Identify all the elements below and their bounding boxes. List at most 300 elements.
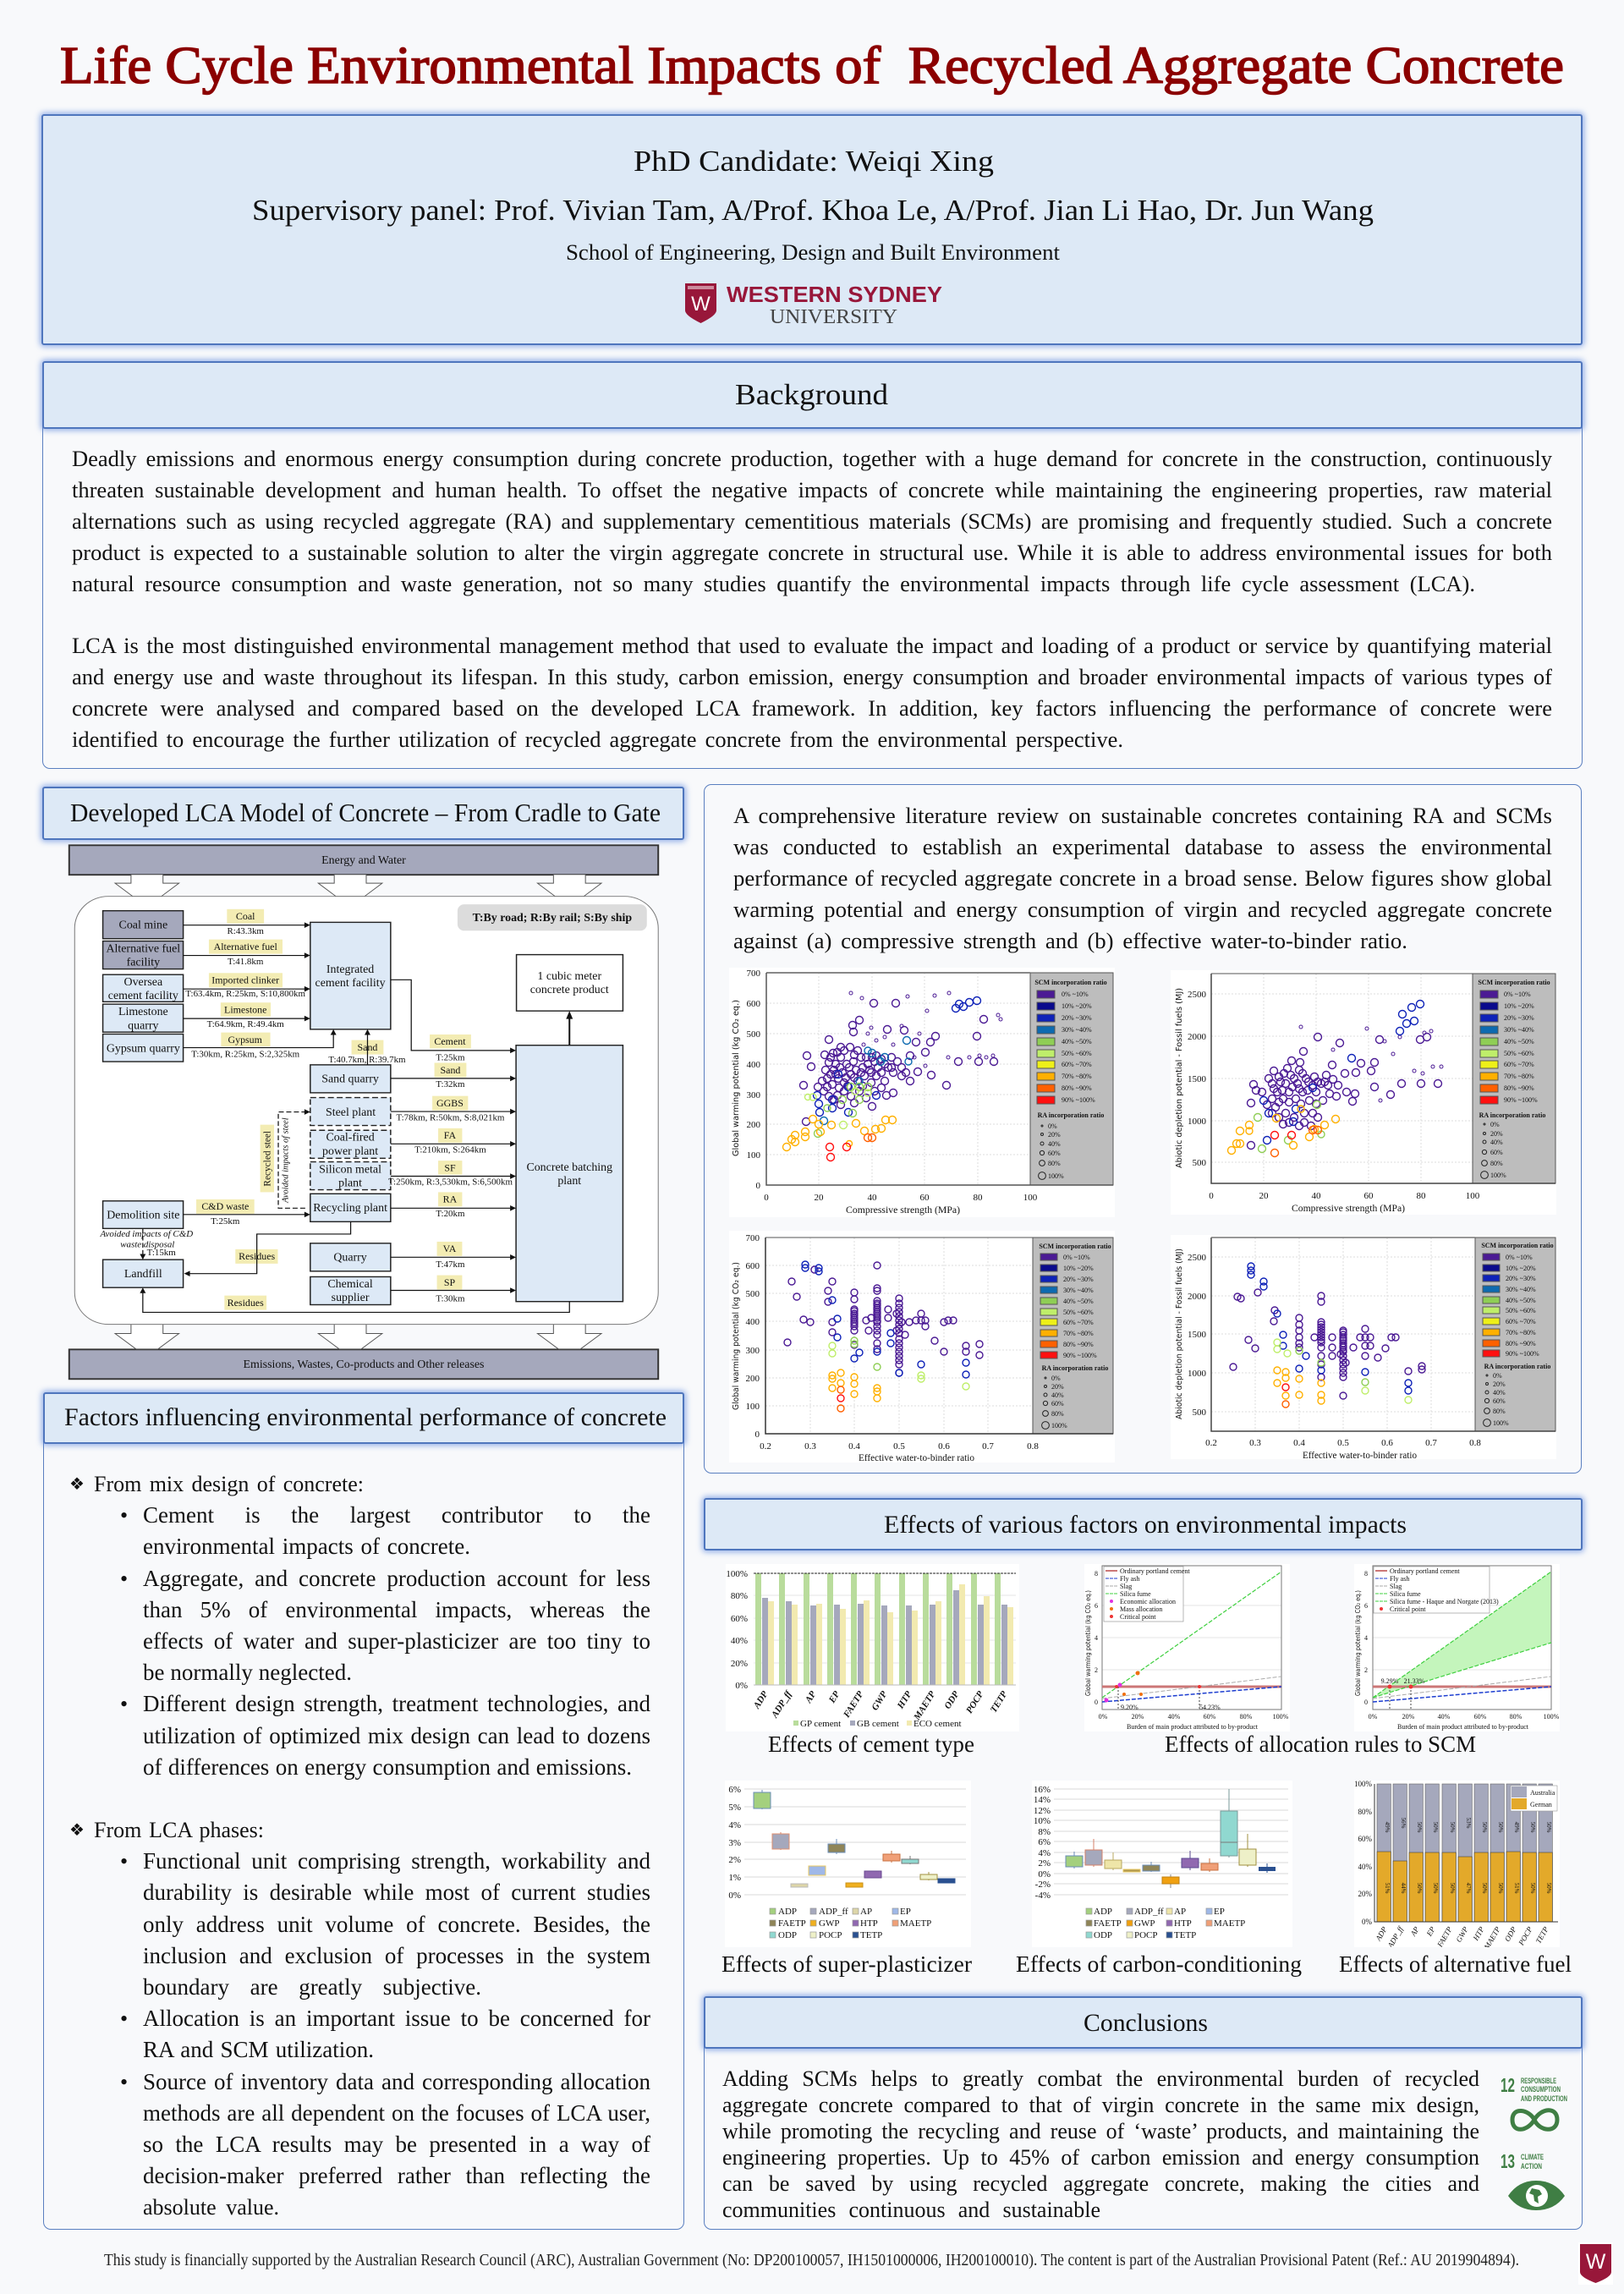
chart: allocation rules right: Silica fume xyxy=(1390,1590,1421,1598)
chart: effects of super-plasticizer: ADP xyxy=(778,1907,797,1917)
chart: effects of carbon-conditioning: POCP xyxy=(1134,1930,1158,1940)
diagram: LCA system boundary flowchart: Coal mine xyxy=(119,919,167,930)
chart: GWP vs compressive strength: 20% xyxy=(1048,1131,1061,1139)
diagram: LCA system boundary flowchart: Alternative fuel xyxy=(106,942,180,954)
diagram: LCA system boundary flowchart: Landfill xyxy=(124,1267,162,1280)
chart: abiotic depletion vs water-to-binder ratio: 60% ~70% xyxy=(1506,1318,1536,1325)
chart: effects of alternative fuel: 49% xyxy=(1513,1822,1520,1833)
panel: conclusions body xyxy=(704,2043,1583,2230)
chart: effects of super-plasticizer: 2% xyxy=(728,1855,741,1865)
chart: abiotic depletion vs water-to-binder ratio: 0.6 xyxy=(1381,1438,1393,1448)
chart: effects of alternative fuel: German xyxy=(1530,1801,1552,1808)
diagram: LCA system boundary flowchart: Coal-fired xyxy=(326,1131,375,1143)
chart: allocation rules left: Economic allocation xyxy=(1120,1598,1176,1605)
chart: abiotic depletion vs water-to-binder ratio: 0.7 xyxy=(1425,1438,1437,1448)
chart: GWP vs water-to-binder ratio: 700 xyxy=(746,1233,760,1243)
heading: conclusions: Conclusions xyxy=(1084,2009,1208,2037)
chart: GWP vs compressive strength: 40% ~50% xyxy=(1062,1038,1092,1045)
chart: abiotic depletion vs compressive strength: Compressive strength (MPa) xyxy=(1292,1202,1405,1214)
caption: super-plasticizer, carbon-conditioning, alternative fuel: Effects of alternative fuel xyxy=(1339,1951,1572,1977)
chart: GWP vs compressive strength: 90% ~100% xyxy=(1062,1096,1095,1104)
text block: factors list: Functional unit comprising strength, workability and xyxy=(143,1848,650,1874)
diagram: LCA system boundary flowchart: T:210km, S:264km xyxy=(414,1146,486,1155)
chart: GWP vs water-to-binder ratio: 0.2 xyxy=(760,1441,771,1452)
panel: authors and affiliation xyxy=(41,114,1583,345)
chart: effects of carbon-conditioning: -2% xyxy=(1035,1880,1051,1890)
text block: factors list: utilization of optimized mix design can lead to dozens xyxy=(143,1722,650,1748)
chart: effects of cement type: GP cement xyxy=(800,1719,841,1729)
diagram: LCA system boundary flowchart: T:30km, R:25km, S:2,325km xyxy=(191,1051,300,1059)
diagram: LCA system boundary flowchart: T:25km xyxy=(211,1217,240,1227)
chart: effects of carbon-conditioning: 12% xyxy=(1034,1806,1051,1816)
chart: allocation rules left: Fly ash xyxy=(1120,1575,1139,1583)
chart: effects of cement type: AP xyxy=(803,1689,819,1705)
diagram: LCA system boundary flowchart: plant xyxy=(338,1177,362,1188)
diagram: LCA system boundary flowchart: Avoided impacts of steel xyxy=(281,1117,291,1204)
chart: abiotic depletion vs water-to-binder ratio: 20% ~30% xyxy=(1506,1275,1536,1282)
text: • xyxy=(120,1503,128,1528)
chart: GWP vs compressive strength: 40% xyxy=(1048,1140,1061,1148)
chart: abiotic depletion vs compressive strength xyxy=(1175,973,1556,1214)
chart: effects of alternative fuel: Australia xyxy=(1530,1789,1555,1797)
panel: factors body xyxy=(43,1438,684,2230)
text block: conclusions: while promoting the recycling and reuse of ‘waste’ products, and maintaining the xyxy=(722,2119,1479,2143)
chart: abiotic depletion vs water-to-binder ratio: 40% xyxy=(1493,1389,1506,1397)
chart: allocation rules left: 2 xyxy=(1095,1666,1098,1674)
chart: effects of alternative fuel: 50% xyxy=(1529,1822,1536,1833)
diagram: LCA system boundary flowchart: Avoided impacts of C&D xyxy=(99,1230,193,1239)
chart: effects of cement type: HTP xyxy=(895,1689,914,1711)
chart: abiotic depletion vs water-to-binder ratio: 10% ~20% xyxy=(1506,1265,1536,1272)
chart: effects of alternative fuel: HTP xyxy=(1471,1925,1486,1943)
chart: abiotic depletion vs compressive strength: 100 xyxy=(1466,1191,1480,1201)
diagram: LCA system boundary flowchart: Concrete batching xyxy=(526,1161,612,1173)
chart: abiotic depletion vs water-to-binder ratio: 0.4 xyxy=(1293,1438,1305,1448)
chart: GWP vs compressive strength: 10% ~20% xyxy=(1062,1002,1092,1010)
text block: background paragraphs: alternations such as using recycled aggregate (RA) and supplementary cementitious materials (SCMs) are promising and frequently studied. Such a concrete xyxy=(72,508,1552,534)
chart: effects of cement type: GWP xyxy=(870,1689,890,1712)
chart: abiotic depletion vs water-to-binder ratio: 1000 xyxy=(1188,1369,1206,1379)
chart: GWP vs water-to-binder ratio xyxy=(732,1233,1113,1463)
title: Life Cycle Environmental Impacts of Recycled Aggregate Concrete xyxy=(60,37,1564,95)
chart: GWP vs compressive strength: 100 xyxy=(1023,1193,1038,1203)
chart: GWP vs water-to-binder ratio: SCM incorporation ratio xyxy=(1039,1243,1111,1250)
chart: abiotic depletion vs water-to-binder ratio: RA incorporation ratio xyxy=(1484,1363,1550,1370)
chart: effects of carbon-conditioning: GWP xyxy=(1134,1918,1155,1929)
chart: GWP vs compressive strength: 0% xyxy=(1048,1122,1057,1130)
text block: background paragraphs: threaten sustainable development and human health. To offset the negative impacts of concrete while maintaining the engineering properties, raw material xyxy=(72,477,1552,502)
chart: abiotic depletion vs water-to-binder ratio: 0.5 xyxy=(1337,1438,1349,1448)
chart: allocation rules right: 6 xyxy=(1364,1602,1368,1610)
chart: effects of cement type: ADP xyxy=(751,1689,771,1711)
panel: authors and affiliation: W xyxy=(691,293,710,316)
chart: effects of alternative fuel: 50% xyxy=(1432,1822,1439,1833)
panel: authors and affiliation: Supervisory panel: Prof. Vivian Tam, A/Prof. Khoa Le, A/Prof. Jian Li Hao, Dr. Jun Wang xyxy=(252,194,1374,227)
diagram: LCA system boundary flowchart: Demolition site xyxy=(107,1209,179,1221)
chart: abiotic depletion vs water-to-binder ratio: 30% ~40% xyxy=(1506,1286,1536,1293)
chart: abiotic depletion vs water-to-binder ratio: 70% ~80% xyxy=(1506,1329,1536,1336)
diagram: LCA system boundary flowchart: FA xyxy=(444,1130,457,1141)
chart: effects of carbon-conditioning xyxy=(1034,1785,1288,1940)
diagram: LCA system boundary flowchart: Integrated xyxy=(326,963,374,975)
diagram: LCA system boundary flowchart: Recycling plant xyxy=(313,1201,387,1214)
text block: factors list: Source of inventory data and corresponding allocation xyxy=(143,2069,650,2094)
chart: effects of cement type: FAETP xyxy=(842,1689,866,1720)
chart: GWP vs compressive strength: 50% ~60% xyxy=(1062,1050,1092,1057)
chart: GWP vs compressive strength: 100 xyxy=(746,1150,761,1161)
chart: effects of alternative fuel: 50% xyxy=(1545,1822,1552,1833)
chart: allocation rules left: 0% xyxy=(1099,1713,1108,1720)
diagram: LCA system boundary flowchart: Chemical xyxy=(327,1278,373,1290)
chart: abiotic depletion vs water-to-binder ratio: 20% xyxy=(1493,1380,1506,1388)
chart: effects of super-plasticizer: 1% xyxy=(728,1873,741,1883)
chart: abiotic depletion vs compressive strength: 60 xyxy=(1363,1191,1374,1201)
chart: effects of super-plasticizer: ODP xyxy=(778,1930,797,1940)
chart: GWP vs water-to-binder ratio: RA incorporation ratio xyxy=(1042,1364,1108,1372)
chart: abiotic depletion vs compressive strength: 40 xyxy=(1311,1191,1321,1201)
chart: effects of alternative fuel: 50% xyxy=(1416,1822,1423,1833)
text block: literature review intro: A comprehensive literature review on sustainable concretes containing RA and SCMs xyxy=(733,802,1552,827)
chart: GWP vs water-to-binder ratio: 20% ~30% xyxy=(1063,1276,1094,1283)
chart: effects of cement type: 0% xyxy=(735,1681,748,1691)
diagram: LCA system boundary flowchart: plant xyxy=(557,1174,581,1187)
text block: conclusions: aggregate concrete compared to that of virgin concrete in the same mix design, xyxy=(722,2093,1479,2117)
chart: effects of alternative fuel: 50% xyxy=(1529,1883,1536,1894)
diagram: LCA system boundary flowchart: Sand quarry xyxy=(321,1073,379,1085)
chart: effects of cement type: EP xyxy=(826,1689,842,1705)
diagram: LCA system boundary flowchart: T:15km xyxy=(147,1249,176,1258)
text block: factors list: effects of water and super-plasticizer are too tiny to xyxy=(143,1628,650,1654)
chart: allocation rules left: 100% xyxy=(1273,1713,1289,1720)
chart: allocation rules left: 20% xyxy=(1132,1713,1144,1720)
diagram: LCA system boundary flowchart: cement facility xyxy=(315,976,386,989)
chart: allocation rules left: 0 xyxy=(1095,1699,1098,1706)
heading: conclusions xyxy=(704,1996,1583,2049)
text: • xyxy=(120,1849,128,1874)
chart: allocation rules left: 54.23% xyxy=(1199,1704,1221,1711)
diagram: LCA system boundary flowchart: T:63.4km, R:25km, S:10,800km xyxy=(185,990,306,999)
text block: conclusions xyxy=(722,2066,1479,2222)
text block: factors list: inclusion and exclusion of processes in the system xyxy=(143,1943,650,1968)
chart: allocation rules right: 0 xyxy=(1364,1699,1368,1706)
text block: factors list: From LCA phases: xyxy=(94,1818,264,1842)
chart: effects of carbon-conditioning: ADP xyxy=(1094,1907,1112,1917)
chart: GWP vs water-to-binder ratio: 20% xyxy=(1051,1383,1064,1391)
diagram: LCA system boundary flowchart: Residues xyxy=(228,1298,264,1309)
diagram: LCA system boundary flowchart: T:By road; R:By rail; S:By ship xyxy=(473,911,632,924)
caption: cement type and allocation rules xyxy=(768,1731,1476,1757)
panel: literature review xyxy=(704,784,1582,1474)
chart: effects of super-plasticizer: FAETP xyxy=(778,1918,806,1929)
text block: background paragraphs: LCA is the most distinguished environmental management method that used to evaluate the impact and loading of a product or service by quantifying material xyxy=(72,633,1552,658)
chart: GWP vs water-to-binder ratio: Global warming potential (kg CO₂ eq.) xyxy=(732,1262,741,1410)
chart: effects of cement type: 20% xyxy=(731,1659,748,1669)
chart: GWP vs water-to-binder ratio: 0.5 xyxy=(893,1441,905,1452)
diagram: LCA system boundary flowchart: GGBS xyxy=(436,1098,464,1109)
chart: abiotic depletion vs compressive strength: 90% ~100% xyxy=(1504,1096,1538,1104)
chart: effects of carbon-conditioning: 14% xyxy=(1034,1795,1051,1805)
chart: abiotic depletion vs compressive strength: 80% ~90% xyxy=(1504,1084,1534,1092)
chart: GWP vs compressive strength: 60 xyxy=(920,1193,930,1203)
chart: allocation rules left: Critical point xyxy=(1120,1613,1156,1621)
chart: effects of alternative fuel: 44% xyxy=(1400,1883,1407,1894)
chart: allocation rules left: Mass allocation xyxy=(1120,1605,1162,1613)
diagram: LCA system boundary flowchart: VA xyxy=(443,1243,457,1254)
chart: GWP vs compressive strength: 500 xyxy=(746,1029,761,1040)
diagram: LCA system boundary flowchart: Oversea xyxy=(124,975,162,988)
text block: background paragraphs: product is expected to a sustainable solution to alter the virgin aggregate concrete in structural use. While it is able to address environmental issues for both xyxy=(72,540,1552,565)
chart: effects of carbon-conditioning: 2% xyxy=(1038,1858,1051,1869)
chart: GWP vs compressive strength: 30% ~40% xyxy=(1062,1026,1092,1034)
chart: GWP vs water-to-binder ratio: 50% ~60% xyxy=(1063,1309,1094,1316)
chart: GWP vs water-to-binder ratio: 40% xyxy=(1051,1391,1064,1399)
chart: effects of carbon-conditioning: 0% xyxy=(1038,1869,1051,1880)
icon: university shield: W xyxy=(1586,2250,1606,2274)
text block: factors list: be normally neglected. xyxy=(143,1660,352,1685)
panel: authors and affiliation: WESTERN SYDNEY xyxy=(727,282,942,307)
chart: abiotic depletion vs water-to-binder ratio: 1500 xyxy=(1188,1330,1206,1340)
chart: GWP vs water-to-binder ratio: 90% ~100% xyxy=(1063,1352,1097,1359)
chart: abiotic depletion vs compressive strength: 20% xyxy=(1490,1130,1503,1138)
chart: allocation rules right: 8 xyxy=(1364,1570,1368,1578)
diagram: LCA system boundary flowchart: T:78km, R:50km, S:8,021km xyxy=(397,1114,505,1122)
chart: GWP vs compressive strength: 20 xyxy=(814,1193,824,1203)
diagram: LCA system boundary flowchart: Coal xyxy=(236,911,255,922)
heading: factors: Factors influencing environmental performance of concrete xyxy=(64,1403,667,1431)
chart: abiotic depletion vs compressive strength: Abiotic depletion potential - Fossil fuels (MJ) xyxy=(1175,988,1184,1168)
text block: factors list xyxy=(69,1472,650,2220)
chart: abiotic depletion vs compressive strength: 1500 xyxy=(1188,1074,1206,1084)
diagram: LCA system boundary flowchart: T:64.9km, R:49.4km xyxy=(207,1020,285,1029)
chart: effects of alternative fuel: ODP xyxy=(1503,1925,1518,1943)
text block: conclusions: communities continuous and sustainable xyxy=(722,2198,1100,2222)
chart: effects of super-plasticizer: 4% xyxy=(728,1820,741,1830)
chart: effects of alternative fuel: 40% xyxy=(1358,1863,1372,1871)
diagram: LCA system boundary flowchart: Cement xyxy=(434,1037,466,1047)
text: • xyxy=(120,2006,128,2031)
chart: effects of alternative fuel: 50% xyxy=(1449,1883,1456,1894)
chart: allocation rules right: 60% xyxy=(1474,1713,1487,1720)
icon: SDG 12 and 13 goals: 12 xyxy=(1501,2074,1515,2096)
chart: abiotic depletion vs compressive strength: 20% ~30% xyxy=(1504,1014,1534,1022)
chart: effects of super-plasticizer: TETP xyxy=(860,1930,882,1940)
chart: allocation rules left: Slag xyxy=(1120,1583,1132,1590)
chart: abiotic depletion vs water-to-binder ratio: Abiotic depletion potential - Fossil fuels (MJ) xyxy=(1175,1249,1184,1419)
heading: effects of various factors xyxy=(704,1498,1583,1550)
chart: effects of alternative fuel: 53% xyxy=(1465,1818,1472,1829)
chart: abiotic depletion vs water-to-binder ratio: 90% ~100% xyxy=(1506,1350,1539,1358)
chart: allocation rules left: 8 xyxy=(1095,1570,1098,1578)
chart: abiotic depletion vs compressive strength: 10% ~20% xyxy=(1504,1002,1534,1010)
chart: GWP vs compressive strength: 200 xyxy=(746,1120,761,1130)
caption: cement type and allocation rules: Effects of cement type xyxy=(768,1731,974,1757)
chart: GWP vs compressive strength: Global warming potential (kg CO₂ eq.) xyxy=(732,1000,741,1156)
diagram: LCA system boundary flowchart: SF xyxy=(444,1163,456,1173)
chart: allocation rules right: 20% xyxy=(1402,1713,1415,1720)
chart: allocation rules right: Slag xyxy=(1390,1583,1402,1590)
chart: GWP vs compressive strength: 400 xyxy=(746,1060,761,1070)
text block: factors list: decision-maker preferred rather than reflecting the xyxy=(143,2163,650,2188)
diagram: LCA system boundary flowchart: Alternative fuel xyxy=(214,941,277,952)
chart: effects of alternative fuel: EP xyxy=(1424,1925,1437,1938)
chart: allocation rules right: Fly ash xyxy=(1390,1575,1409,1583)
chart: effects of cement type: TETP xyxy=(989,1689,1010,1715)
chart: effects of super-plasticizer xyxy=(728,1785,966,1940)
chart: effects of alternative fuel: 56% xyxy=(1400,1818,1407,1829)
chart: effects of alternative fuel: AP xyxy=(1408,1925,1421,1938)
panel: authors and affiliation: PhD Candidate: Weiqi Xing xyxy=(634,145,994,178)
text block: literature review intro: performance of recycled aggregate concrete in a broad sense. Below figures show global xyxy=(733,865,1552,891)
chart: abiotic depletion vs compressive strength: 0 xyxy=(1209,1191,1214,1201)
diagram: LCA system boundary flowchart: T:41.8km xyxy=(228,958,264,967)
chart: effects of alternative fuel: 50% xyxy=(1481,1883,1488,1894)
chart: effects of super-plasticizer: MAETP xyxy=(900,1918,931,1929)
chart: effects of alternative fuel: 50% xyxy=(1416,1883,1423,1894)
chart: allocation rules left: 6 xyxy=(1095,1602,1098,1610)
chart: effects of super-plasticizer: GWP xyxy=(819,1918,839,1929)
panel: background text xyxy=(42,427,1583,769)
chart: effects of super-plasticizer: HTP xyxy=(860,1918,878,1929)
icon: SDG 12 and 13 goals: CLIMATE xyxy=(1521,2153,1544,2161)
icon: SDG 12 and 13 goals: 13 xyxy=(1501,2150,1515,2172)
text block: conclusions: engineering properties. Up to 45% of carbon emission and energy consumption xyxy=(722,2145,1479,2170)
chart: effects of super-plasticizer: 6% xyxy=(728,1785,741,1795)
chart: allocation rules right: 9.29% xyxy=(1381,1677,1399,1685)
diagram: LCA system boundary flowchart: quarry xyxy=(128,1019,159,1031)
chart: effects of carbon-conditioning: ADP_ff xyxy=(1134,1907,1164,1917)
chart: effects of carbon-conditioning: 6% xyxy=(1038,1837,1051,1847)
chart: allocation rules right: 2 xyxy=(1364,1666,1368,1674)
text block: literature review intro: warming potential and energy consumption of virgin and recycled aggregate concrete xyxy=(733,897,1552,922)
caption: cement type and allocation rules: Effects of allocation rules to SCM xyxy=(1165,1731,1476,1757)
chart: GWP vs water-to-binder ratio: 60% xyxy=(1051,1400,1064,1408)
chart: GWP vs compressive strength xyxy=(732,969,1113,1216)
chart: GWP vs compressive strength: 0 xyxy=(764,1193,769,1203)
text block: literature review intro: against (a) compressive strength and (b) effective water-to-binder ratio. xyxy=(733,928,1407,953)
chart: GWP vs water-to-binder ratio: 100% xyxy=(1051,1422,1067,1430)
chart: abiotic depletion vs water-to-binder ratio: 0.2 xyxy=(1205,1438,1217,1448)
chart: effects of alternative fuel: 50% xyxy=(1497,1822,1504,1833)
chart: effects of cement type: 80% xyxy=(731,1591,748,1601)
text: • xyxy=(120,1692,128,1716)
text block: factors list: absolute value. xyxy=(143,2195,279,2220)
chart: abiotic depletion vs water-to-binder ratio: 0.8 xyxy=(1469,1438,1481,1448)
chart: GWP vs water-to-binder ratio: 500 xyxy=(746,1289,760,1299)
chart: abiotic depletion vs water-to-binder ratio: 80% ~90% xyxy=(1506,1340,1536,1347)
chart: abiotic depletion vs compressive strength: 100% xyxy=(1490,1172,1506,1179)
text block: factors list: than 5% of environmental impacts, whereas the xyxy=(143,1597,650,1622)
chart: effects of carbon-conditioning: FAETP xyxy=(1094,1918,1122,1929)
text: ❖ xyxy=(69,1819,85,1840)
chart: GWP vs compressive strength: 40 xyxy=(868,1193,877,1203)
chart: effects of super-plasticizer: 3% xyxy=(728,1838,741,1848)
chart: GWP vs water-to-binder ratio: 80% ~90% xyxy=(1063,1341,1094,1348)
chart: effects of alternative fuel: TETP xyxy=(1534,1925,1550,1945)
text block: factors list: methods are all dependent on the focuses of LCA user, xyxy=(143,2100,650,2126)
diagram: LCA system boundary flowchart: T:32km xyxy=(436,1080,465,1089)
chart: abiotic depletion vs water-to-binder ratio: 60% xyxy=(1493,1397,1506,1405)
chart: effects of alternative fuel: GWP xyxy=(1454,1925,1470,1944)
chart: abiotic depletion vs water-to-binder ratio: 500 xyxy=(1193,1408,1206,1418)
chart: GWP vs compressive strength: Compressive strength (MPa) xyxy=(846,1204,960,1216)
chart: allocation rules left: Burden of main product attributed to by-product xyxy=(1127,1723,1259,1731)
text block: background paragraphs: concrete were analysed and compared based on the developed LCA framework. In addition, key factors influencing the performance of concrete were xyxy=(72,695,1552,721)
chart: effects of carbon-conditioning: 16% xyxy=(1034,1785,1051,1795)
chart: effects of super-plasticizer: AP xyxy=(860,1907,872,1917)
chart: GWP vs compressive strength: 80% xyxy=(1048,1160,1061,1167)
caption: super-plasticizer, carbon-conditioning, alternative fuel xyxy=(721,1951,1572,1977)
chart: GWP vs compressive strength: 60% ~70% xyxy=(1062,1061,1092,1068)
chart: GWP vs compressive strength: 70% ~80% xyxy=(1062,1073,1092,1080)
chart: abiotic depletion vs compressive strength: 2000 xyxy=(1188,1032,1206,1042)
text block: conclusions: Adding SCMs helps to greatly combat the environmental burden of recycled xyxy=(722,2066,1479,2091)
chart: GWP vs water-to-binder ratio: 200 xyxy=(746,1374,760,1384)
text block: background paragraphs: and energy use and waste throughout its lifespan. In this study, carbon emission, energy consumption and broader environmental impacts of various types of xyxy=(72,664,1552,689)
diagram: LCA system boundary flowchart: Recycled steel xyxy=(261,1131,273,1187)
chart: allocation rules right: 0% xyxy=(1369,1713,1378,1720)
diagram: LCA system boundary flowchart: Silicon metal xyxy=(319,1163,381,1175)
chart: allocation rules right: 100% xyxy=(1544,1713,1560,1720)
chart: abiotic depletion vs water-to-binder ratio: 80% xyxy=(1493,1408,1506,1415)
heading: background: Background xyxy=(735,378,889,411)
chart: effects of carbon-conditioning: 8% xyxy=(1038,1827,1051,1837)
diagram: LCA system boundary flowchart: R:43.3km xyxy=(227,927,265,936)
text: • xyxy=(120,2070,128,2094)
chart: abiotic depletion vs compressive strength: 80% xyxy=(1490,1160,1503,1167)
chart: effects of carbon-conditioning: 4% xyxy=(1038,1848,1051,1858)
diagram: LCA system boundary flowchart: Sand xyxy=(358,1042,378,1053)
diagram: LCA system boundary flowchart: Gypsum xyxy=(228,1034,262,1045)
diagram: LCA system boundary flowchart: Steel plant xyxy=(326,1106,376,1118)
chart: abiotic depletion vs water-to-binder ratio: 0% xyxy=(1493,1372,1502,1380)
diagram: LCA system boundary flowchart: T:250km, R:3,530km, S:6,500km xyxy=(388,1178,513,1187)
chart: GWP vs compressive strength: 80% ~90% xyxy=(1062,1084,1092,1092)
text block: factors list: Cement is the largest contributor to the xyxy=(143,1502,650,1528)
text block: background paragraphs xyxy=(72,446,1552,752)
text block: literature review intro xyxy=(733,802,1552,953)
chart: GWP vs compressive strength: 0 xyxy=(756,1181,761,1191)
chart: GWP vs water-to-binder ratio: 0.3 xyxy=(804,1441,816,1452)
chart: GWP vs water-to-binder ratio: 0.6 xyxy=(938,1441,950,1452)
text block: factors list: environmental impacts of concrete. xyxy=(143,1534,470,1559)
text block: factors list: only address unit volume of concrete. Besides, the xyxy=(143,1912,650,1937)
text block: factors list: From mix design of concrete: xyxy=(94,1472,364,1496)
chart: allocation rules left xyxy=(1084,1565,1289,1731)
chart: GWP vs water-to-binder ratio: 0% xyxy=(1051,1375,1061,1382)
chart: allocation rules right: Critical point xyxy=(1390,1605,1426,1613)
text block: factors list: Allocation is an important issue to be concerned for xyxy=(143,2006,650,2031)
diagram: LCA system boundary flowchart: waste disposal xyxy=(120,1241,174,1249)
chart: effects of alternative fuel: 60% xyxy=(1358,1835,1372,1843)
diagram: LCA system boundary flowchart: cement facility xyxy=(108,989,178,1002)
chart: allocation rules left: 80% xyxy=(1240,1713,1253,1720)
chart: GWP vs compressive strength: RA incorporation ratio xyxy=(1038,1111,1104,1119)
chart: abiotic depletion vs compressive strength: 80 xyxy=(1416,1191,1426,1201)
chart: effects of carbon-conditioning: TETP xyxy=(1174,1930,1196,1940)
chart: abiotic depletion vs water-to-binder ratio: 40% ~50% xyxy=(1506,1297,1536,1304)
chart: GWP vs compressive strength: 600 xyxy=(746,999,761,1009)
chart: effects of carbon-conditioning: MAETP xyxy=(1214,1918,1245,1929)
chart: GWP vs compressive strength: 80 xyxy=(973,1193,983,1203)
chart: effects of alternative fuel: 47% xyxy=(1465,1883,1472,1894)
chart: GWP vs compressive strength: 100% xyxy=(1048,1172,1064,1180)
text block: conclusions: can be saved by using recycled aggregate concrete, making the cities and xyxy=(722,2171,1479,2196)
chart: effects of super-plasticizer: POCP xyxy=(819,1930,842,1940)
diagram: LCA system boundary flowchart xyxy=(68,844,660,1380)
text block: factors list: boundary are greatly subjective. xyxy=(143,1974,481,2000)
chart: allocation rules right: 40% xyxy=(1438,1713,1451,1720)
chart: effects of cement type: 40% xyxy=(731,1636,748,1646)
